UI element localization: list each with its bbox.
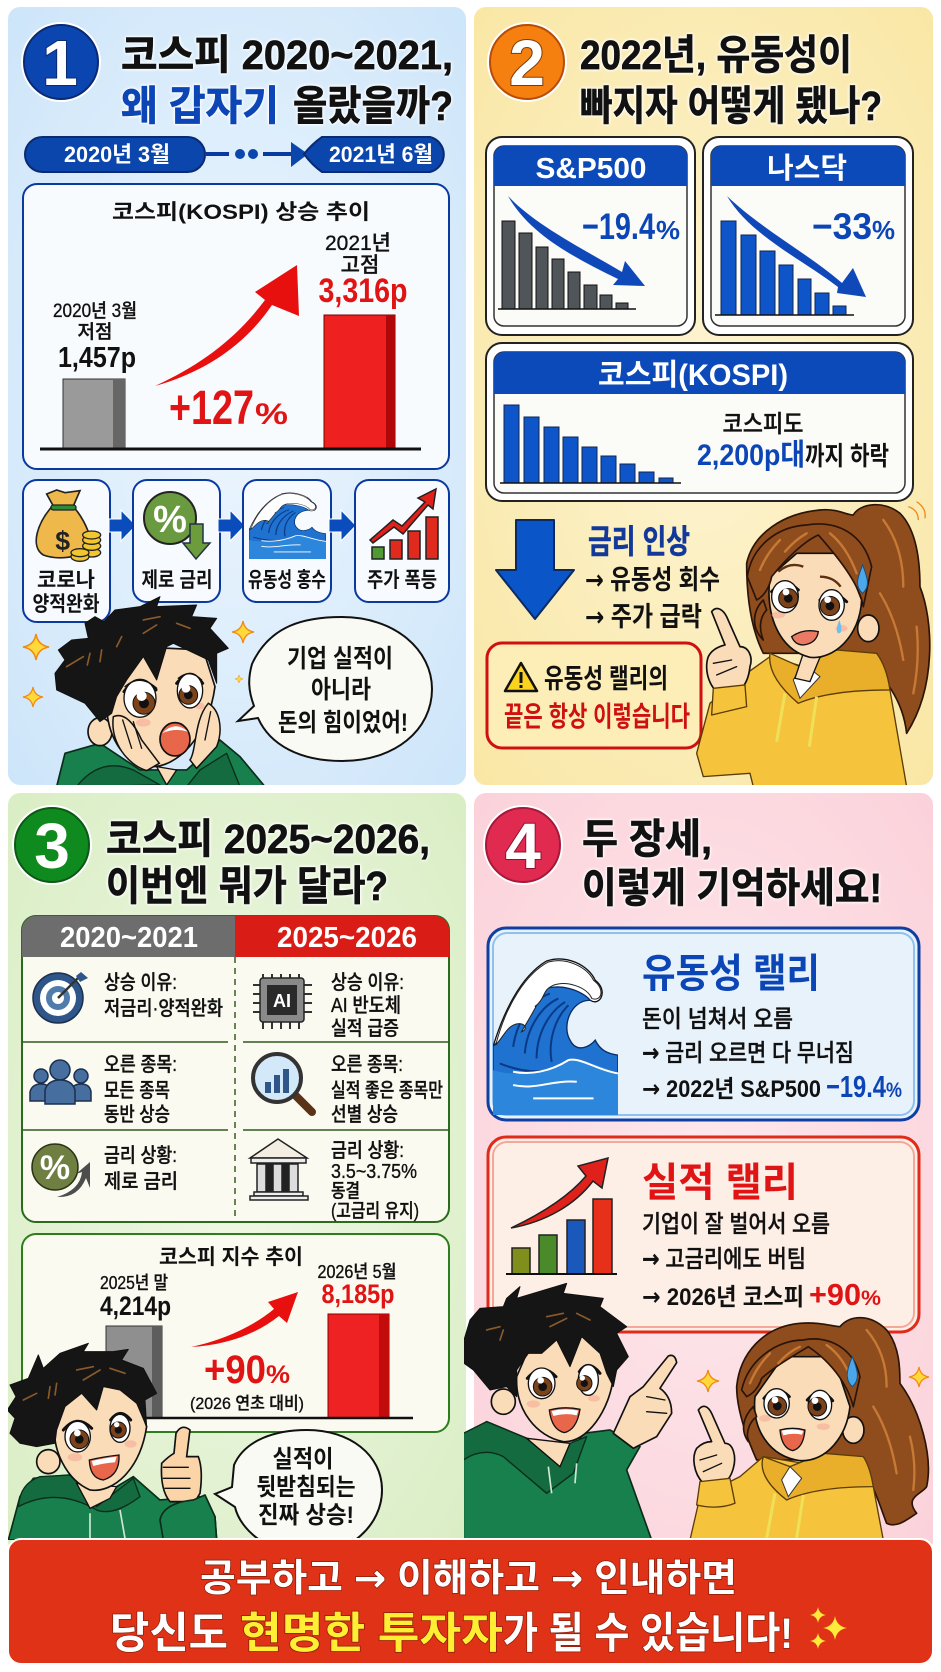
text: stocks left: 모든 종목 [104,1080,170,1102]
character: thumbs-up boy [7,1343,217,1540]
comparison table: 2020~2021 [60,922,198,954]
card: kospi: 2,200p대 [697,439,805,472]
banner: closing message: 현명한 투자자 [240,1610,503,1658]
number badge 2: 2 [509,27,545,99]
title 1: 올랐을까? [293,83,453,129]
bar chart: nasdaq [715,221,854,315]
chart: kospi index trend: 2026년 5월 [318,1262,396,1282]
title 1 [121,32,453,129]
text: rate right: 동결 [331,1180,360,1202]
chart: kospi rise [23,184,449,469]
card: earnings rally: +90 [809,1277,861,1312]
icon: target [33,972,88,1023]
icon: banner sparkles [810,1607,847,1649]
text: rate right: 3.5~3.75% [331,1161,417,1183]
number badge 1: 1 [42,27,78,99]
flow: zero rate: 제로 금리 [142,569,212,592]
number badge 1 [21,22,101,102]
text: stocks right: 오른 종목: [331,1054,403,1076]
number badge 2 [487,22,567,102]
icon: percent olive [32,1144,90,1197]
text: stocks left [104,1054,177,1126]
chart: kospi index trend [22,1234,449,1432]
text: rate right: 금리 상황: [331,1139,404,1162]
character: pointing girl [690,1318,928,1540]
icon: growth chart [506,1158,617,1274]
card: earnings rally: → 고금리에도 버팀 [642,1245,806,1273]
card: liquidity rally: 돈이 넘쳐서 오름 [642,1006,793,1033]
speech bubble 1: 아니라 [311,676,371,704]
sparkles panel 4 [697,1367,929,1392]
card: liquidity rally: 유동성 랠리 [642,952,820,996]
chart: kospi rise: % [255,398,288,431]
bar chart: kospi [500,405,681,483]
text: rate hike chain: 금리 인상 [588,523,690,560]
card: earnings rally: → 2026년 코스피 [642,1283,804,1311]
flow: zero rate [133,480,220,602]
flow: corona easing [23,480,110,622]
card: nasdaq: 나스닥 [767,152,847,185]
chart: kospi rise: 코스피(KOSPI) 상승 추이 [112,201,370,224]
icon: rising bars [370,489,438,559]
banner: closing message: 가 될 수 있습니다! [503,1610,793,1658]
chart: kospi rise: 3,316p [318,272,408,310]
callout: warning: 끝은 항상 이렇습니다 [504,701,690,732]
timeline 2020 to 2021: 2020년 3월 [64,142,170,167]
text: rate left: 금리 상황: [104,1144,177,1167]
text: stocks right: 실적 좋은 종목만 [331,1079,443,1102]
icon: magnifier [253,1054,312,1112]
arrow: big down [496,520,574,619]
icon: warning triangle [505,663,537,691]
character: pointing boy [463,1283,677,1540]
card: liquidity rally: % [886,1079,902,1102]
text: rate hike chain [585,523,720,633]
icon: big wave [493,959,618,1115]
text: rate hike chain: → 주가 급락 [585,602,702,633]
flow: stock surge: 주가 폭등 [367,569,437,592]
character: surprised boy [55,597,265,787]
text: stocks right [331,1054,443,1126]
title 4: 두 장세, [582,816,712,862]
flow: liquidity flood [243,480,331,602]
flow: corona easing: 양적완화 [32,593,100,616]
card: liquidity rally [488,928,919,1120]
icon: percent down: % [153,499,187,541]
icon: percent olive: % [40,1149,70,1187]
title 3: 이번엔 뭐가 달라? [106,863,388,909]
text: rate left: 제로 금리 [104,1170,178,1193]
icon: money bag: $ [55,526,70,556]
card: liquidity rally: −19.4 [826,1069,887,1104]
banner: closing message: 공부하고 → 이해하고 → 인내하면 [200,1556,737,1600]
text: rate right: (고금리 유지) [331,1200,419,1222]
callout: warning: 유동성 랠리의 [544,664,668,694]
character: worried girl [697,502,930,787]
comparison table [22,916,449,1222]
chart: kospi index trend: 2025년 말 [100,1273,168,1293]
icon: people [30,1060,91,1104]
card: kospi [486,343,913,501]
number badge 4: 4 [505,810,541,882]
flow: liquidity flood: 유동성 홍수 [248,569,326,592]
text: stocks left: 동반 상승 [104,1103,170,1126]
text: reason right: AI 반도체 [331,994,401,1017]
title 1: 코스피 2020~2021, [121,32,453,78]
title 2 [580,32,882,129]
speech bubble 3: 실적이 [272,1446,334,1473]
speech bubble 1 [238,617,432,761]
text: rate hike chain: → 유동성 회수 [585,565,720,596]
value: % [656,215,680,245]
title 2: 빠지자 어떻게 됐나? [580,83,882,129]
timeline 2020 to 2021: 2021년 6월 [329,142,433,167]
text: reason right: 상승 이유: [331,971,404,994]
speech bubble 1: 기업 실적이 [287,645,393,673]
panel: 1 kospi 2020-2021 rise [8,7,466,787]
panel: 4 remember two rallies [474,793,933,1553]
icon: bank [250,1139,308,1200]
speech bubble 1: 돈의 힘이었어! [278,709,408,737]
chart: kospi rise: 2020년 3월 [53,300,137,322]
card: kospi: 코스피(KOSPI) [598,359,788,392]
bar chart: sp500 [498,221,636,309]
text: stocks right: 선별 상승 [331,1103,398,1126]
text: reason left [104,971,223,1020]
chart: kospi index trend: 코스피 지수 추이 [159,1246,303,1269]
comparison table: 2025~2026 [277,922,417,954]
panel: 2 2022 liquidity out [474,7,933,787]
speech bubble 3: 진짜 상승! [258,1502,354,1529]
icon: money bag [36,490,101,561]
value: −33 [812,206,872,247]
title 4 [582,816,882,911]
card: liquidity rally: → 금리 오르면 다 무너짐 [642,1039,854,1067]
number badge 4 [483,805,563,885]
chart: kospi index trend: % [266,1361,290,1389]
icon: wave [249,493,326,559]
text: reason right: 실적 급증 [331,1017,399,1040]
text: reason right [331,971,404,1040]
callout: warning [487,643,701,748]
text: reason left: 상승 이유: [104,971,177,994]
flow: corona easing: 코로나 [37,569,95,592]
value: −19.4 [582,206,655,247]
chart: kospi rise: 고점 [341,254,379,277]
speech bubble 3: 뒷받침되는 [256,1474,356,1501]
chart: kospi index trend: 4,214p [100,1291,171,1321]
card: sp500: S&P500 [536,153,646,185]
title 4: 이렇게 기억하세요! [582,865,882,911]
panel: 3 kospi 2025-2026 [7,793,466,1555]
speech bubble 3 [212,1429,383,1538]
card: earnings rally: 기업이 잘 벌어서 오름 [642,1211,830,1238]
icon: ai chip: AI [273,991,291,1011]
sparkles [23,621,254,707]
value: % [872,215,895,245]
banner: closing message: 당신도 [110,1610,228,1658]
flow: stock surge [355,480,449,602]
card: liquidity rally: → 2022년 S&P500 [642,1075,821,1103]
card: earnings rally: % [861,1287,881,1310]
card: earnings rally: 실적 랠리 [642,1161,798,1205]
arrow: flow 2 [218,510,245,541]
card: earnings rally [488,1137,919,1332]
chart: kospi index trend: 8,185p [322,1279,394,1309]
arrow: flow 1 [109,510,136,541]
chart: kospi index trend: (2026 연초 대비) [190,1394,304,1413]
number badge 3: 3 [34,810,70,882]
title 1: 왜 갑자기 [121,83,279,129]
card: kospi: 까지 하락 [805,441,889,471]
text: reason left: 저금리·양적완화 [104,997,223,1020]
text: rate left [104,1144,178,1193]
icon: ai chip [253,974,312,1029]
chart: kospi rise: 1,457p [58,342,136,374]
banner: closing message [8,1539,933,1664]
title 3 [106,816,430,909]
timeline 2020 to 2021 [25,137,444,172]
chart: kospi rise: +127 [169,382,254,435]
card: kospi: 코스피도 [722,411,804,438]
arrow: flow 3 [329,510,356,541]
title 2: 2022년, 유동성이 [580,32,852,78]
text: rate right [331,1139,419,1222]
arrow: sp500 down [508,196,645,286]
title 3: 코스피 2025~2026, [106,816,430,862]
arrow: nasdaq down [727,196,866,297]
chart: kospi rise: 저점 [78,321,112,343]
card: nasdaq [703,137,913,335]
chart: kospi index trend: +90 [204,1348,266,1392]
card: sp500 [486,137,695,335]
number badge 3 [12,805,92,885]
text: stocks left: 오른 종목: [104,1054,177,1076]
chart: kospi rise: 2021년 [325,232,391,255]
